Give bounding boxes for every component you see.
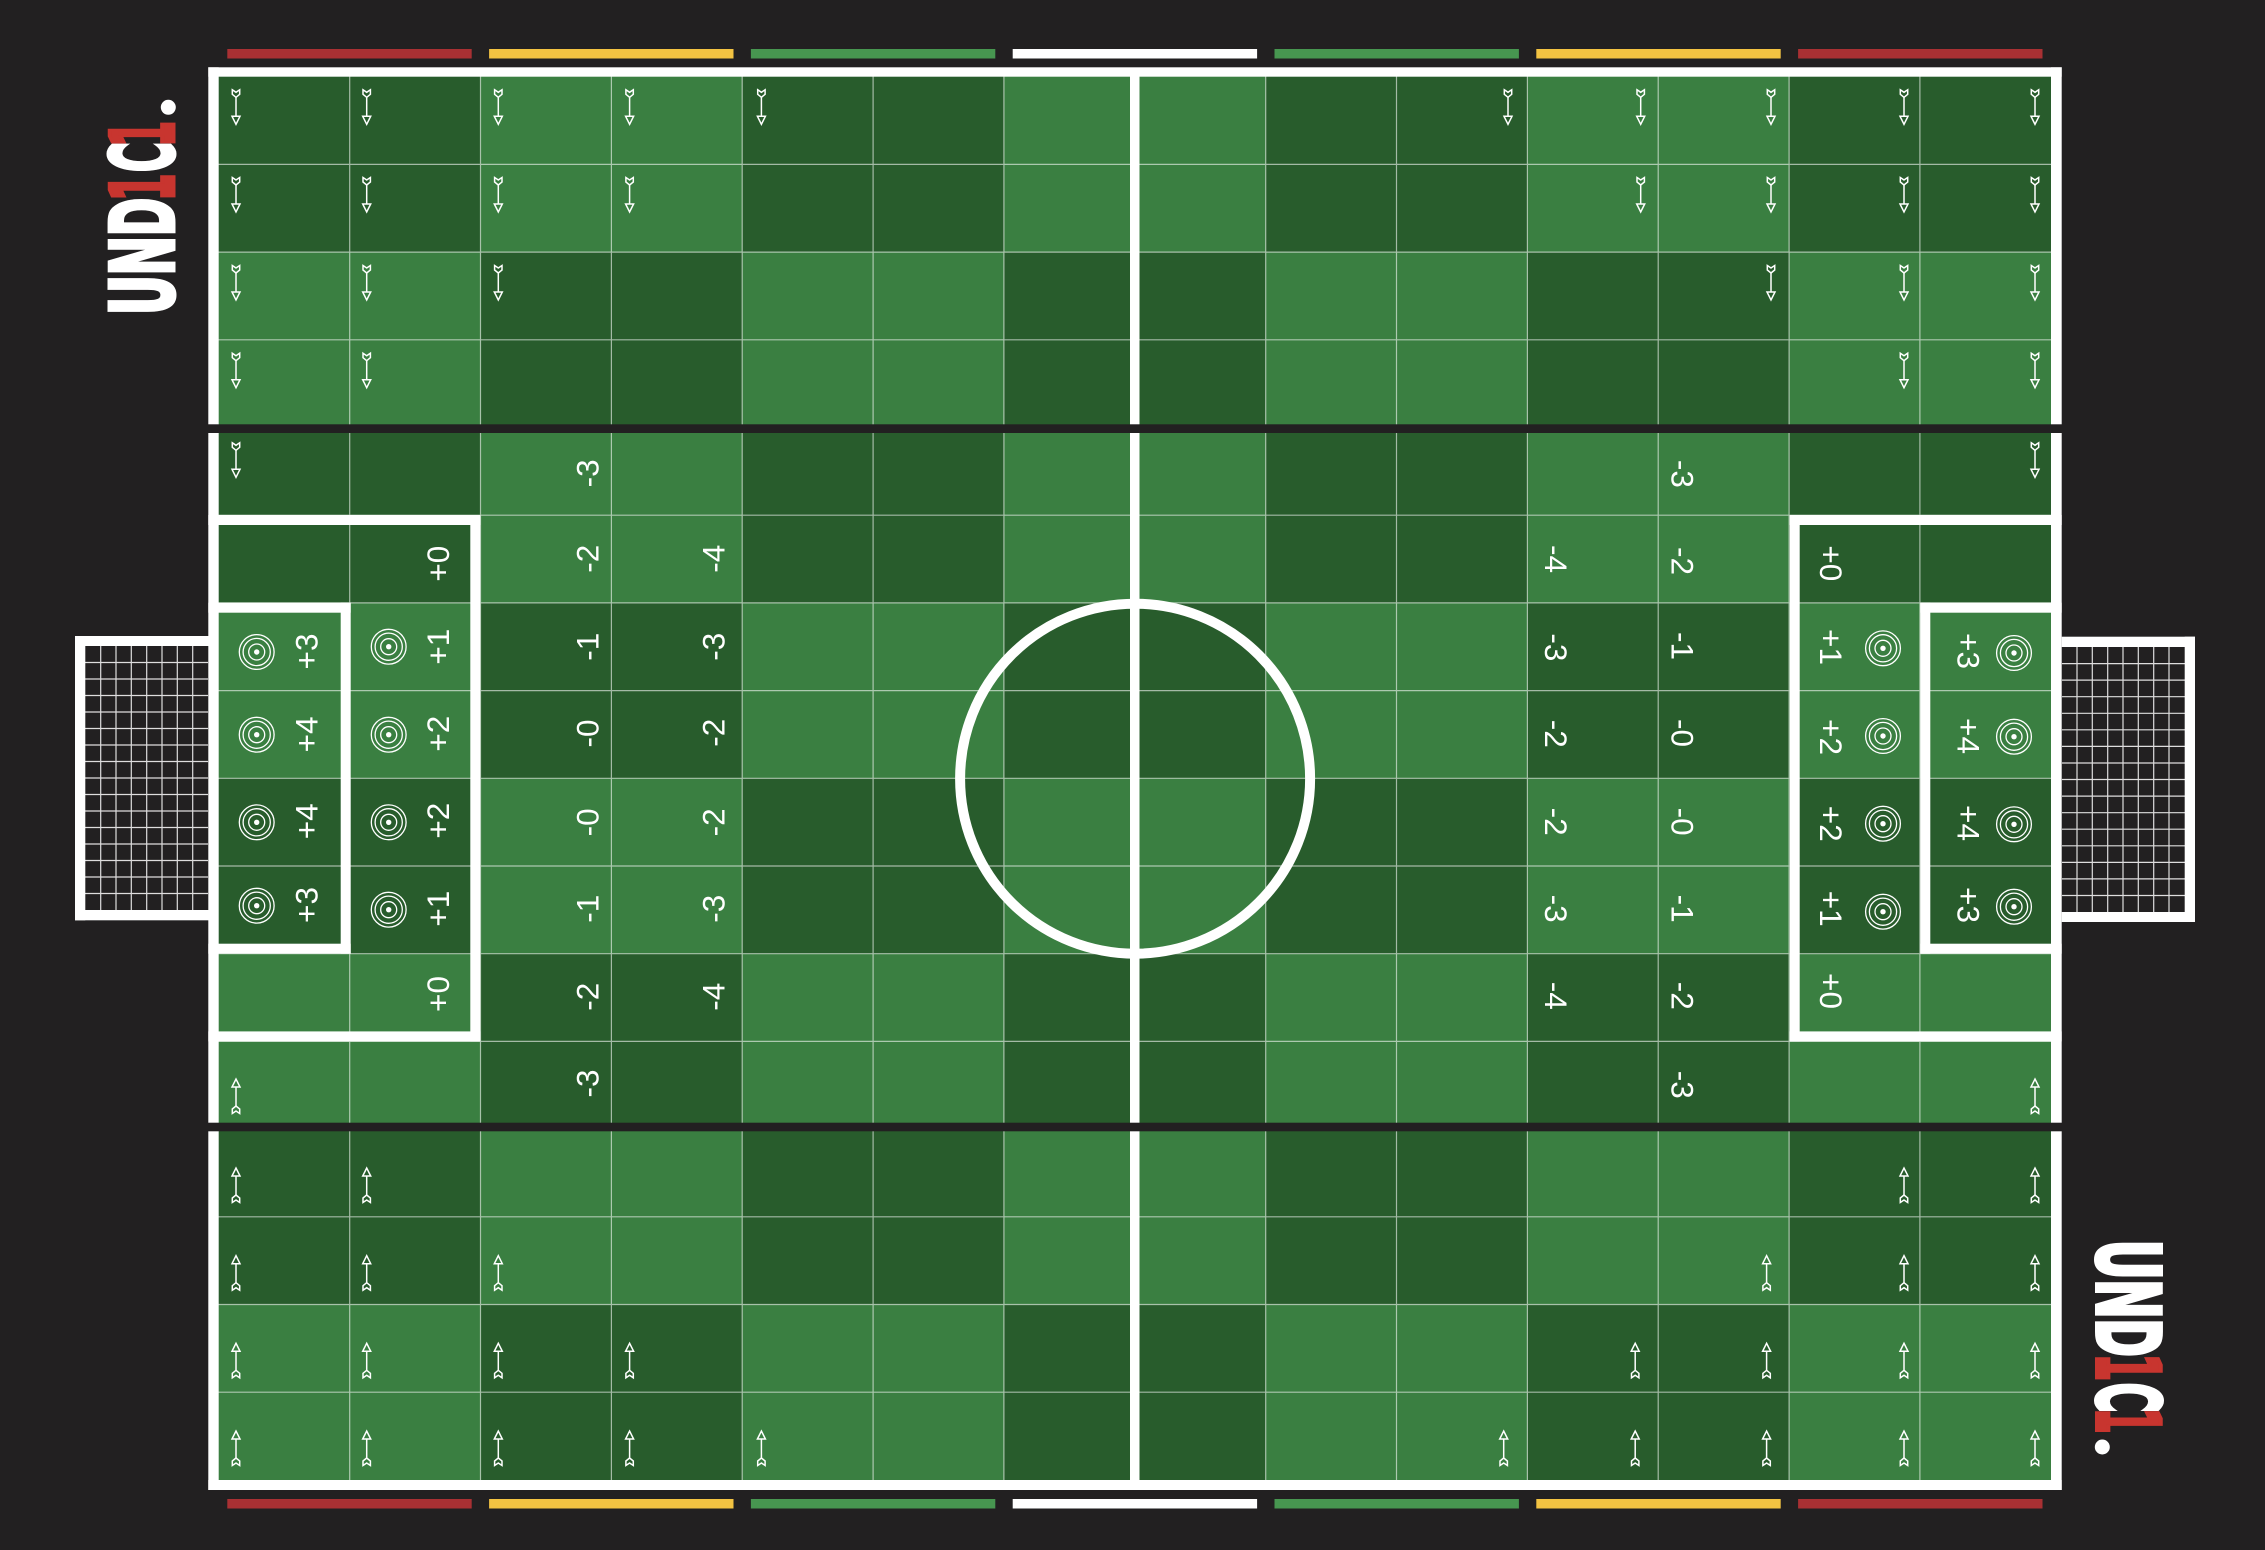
arrow [363, 1343, 371, 1378]
logo: top left: 1 [93, 173, 194, 201]
pitch outer boundary [208, 67, 2062, 1490]
left bonus labels [289, 546, 456, 1012]
logo: bottom right: C [2075, 1383, 2176, 1413]
arrow [1900, 178, 1908, 212]
left goal net [75, 636, 208, 920]
right penalty labels: -1 [1664, 632, 1700, 660]
arrow [1900, 266, 1908, 300]
right penalty labels: -2 [1664, 547, 1700, 575]
arrow [363, 1168, 371, 1202]
arrow [757, 1431, 765, 1466]
arrow [1900, 1431, 1908, 1466]
arrow [2031, 1256, 2039, 1290]
icon: target [371, 629, 406, 664]
right bonus labels: +4 [1950, 718, 1986, 754]
right penalty box [1790, 515, 2062, 1041]
left penalty labels: -3 [569, 459, 605, 487]
arrow [1900, 1343, 1908, 1378]
top colour stripes [227, 49, 2042, 58]
right shooting targets [1866, 631, 2031, 929]
arrow [1767, 178, 1775, 212]
arrow [232, 1431, 240, 1466]
right bonus labels: +1 [1813, 891, 1849, 927]
upper dark band [208, 424, 2062, 433]
right goal box [1920, 603, 2062, 954]
icon: target [1997, 719, 2031, 754]
logo: top left: D [94, 198, 195, 236]
arrow [494, 1256, 502, 1290]
arrow [494, 90, 502, 124]
bottom colour stripes [227, 1499, 2042, 1508]
arrow [1900, 1256, 1908, 1290]
arrow [232, 443, 240, 477]
centre circle [960, 604, 1310, 954]
halfway line [1130, 70, 1140, 1485]
left bonus labels: +2 [420, 716, 456, 752]
icon: target [1997, 889, 2031, 924]
logo: top left: N [93, 236, 195, 276]
left penalty labels: -3 [569, 1069, 605, 1098]
right penalty labels: -2 [1664, 982, 1700, 1010]
arrow [494, 266, 502, 300]
arrow [494, 1431, 502, 1466]
logo: top left [93, 100, 195, 315]
arrow [1763, 1256, 1771, 1290]
left bonus labels: +4 [289, 716, 325, 752]
left penalty labels [569, 459, 732, 1098]
icon: target [371, 892, 406, 927]
logo: top left: U [93, 275, 195, 315]
right penalty labels: -2 [1538, 808, 1574, 836]
right bonus labels: +0 [1813, 545, 1849, 581]
arrow [1767, 266, 1775, 300]
right penalty labels: -3 [1538, 895, 1574, 923]
arrow [2031, 443, 2039, 477]
arrow [626, 1431, 634, 1466]
right bonus labels: +3 [1950, 633, 1986, 669]
left penalty labels: -3 [696, 895, 732, 923]
left bonus labels: +4 [289, 803, 325, 839]
down arrows: top half [232, 90, 2039, 477]
logo: bottom right [2075, 1239, 2178, 1454]
left penalty labels: -2 [569, 545, 605, 573]
arrow [232, 1256, 240, 1290]
arrow [232, 1343, 240, 1378]
left penalty box [208, 515, 480, 1041]
arrow [232, 1079, 240, 1114]
arrow [494, 178, 502, 212]
icon: target [1866, 719, 1900, 753]
icon: target [1866, 631, 1900, 666]
arrow [494, 1343, 502, 1378]
left penalty labels: -2 [569, 983, 605, 1011]
arrow [626, 1343, 634, 1378]
left penalty labels: -0 [569, 719, 605, 748]
right penalty labels: -3 [1664, 1071, 1700, 1099]
icon: target [1997, 636, 2031, 670]
arrow [2031, 178, 2039, 212]
arrow [1763, 1343, 1771, 1378]
arrow [2031, 90, 2039, 124]
right bonus labels: +4 [1950, 805, 1986, 841]
pitch checker turf [218, 70, 2052, 1482]
arrow [1900, 353, 1908, 388]
arrow [363, 1431, 371, 1466]
arrow [232, 353, 240, 388]
arrow [626, 178, 634, 212]
arrow [2031, 353, 2039, 388]
arrow [363, 266, 371, 300]
arrow [2031, 1079, 2039, 1114]
logo: bottom right: U [2076, 1239, 2178, 1280]
logo: bottom right: D [2076, 1318, 2177, 1357]
right bonus labels: +2 [1813, 806, 1849, 842]
left penalty labels: -2 [696, 719, 732, 747]
right penalty labels: -0 [1664, 808, 1700, 836]
arrow [1900, 1168, 1908, 1202]
arrow [363, 353, 371, 388]
left penalty labels: -1 [569, 633, 605, 661]
logo: bottom right: 1 [2076, 1354, 2178, 1381]
arrow [1763, 1431, 1771, 1466]
arrow [363, 1256, 371, 1290]
arrow [1767, 90, 1775, 124]
right penalty labels: -4 [1538, 982, 1574, 1010]
left penalty labels: -4 [696, 545, 732, 573]
arrow [2031, 1431, 2039, 1466]
left penalty labels: -3 [696, 633, 732, 661]
icon: target [239, 635, 274, 669]
left goal box [208, 603, 351, 954]
left bonus labels: +1 [420, 629, 456, 665]
arrow [363, 90, 371, 124]
arrow [1631, 1343, 1639, 1378]
arrow [232, 178, 240, 212]
right penalty labels [1538, 460, 1700, 1099]
right penalty labels: -4 [1538, 545, 1574, 573]
arrow [1637, 90, 1645, 124]
logo: bottom right: N [2076, 1279, 2178, 1319]
right penalty labels: -2 [1538, 720, 1574, 748]
icon: target [1997, 807, 2031, 842]
arrow [757, 90, 765, 124]
arrow [2031, 1343, 2039, 1378]
arrow [363, 178, 371, 212]
arrow [1900, 90, 1908, 124]
icon: target [1866, 806, 1900, 841]
arrow [626, 90, 634, 124]
left penalty labels: -4 [696, 983, 732, 1011]
left penalty labels: -1 [569, 895, 605, 923]
logo: top left: C [94, 142, 195, 172]
left bonus labels: +0 [420, 976, 456, 1012]
left penalty labels: -0 [569, 808, 605, 836]
icon: target [239, 888, 274, 923]
arrow [1504, 90, 1512, 124]
arrow [232, 90, 240, 124]
right bonus labels: +1 [1813, 629, 1849, 665]
arrow [1637, 178, 1645, 212]
logo: bottom right: 1 [2076, 1408, 2178, 1434]
arrow [232, 266, 240, 300]
right bonus labels [1813, 545, 1986, 1009]
right goal net [2062, 637, 2195, 922]
right bonus labels: +0 [1813, 973, 1849, 1009]
left bonus labels: +0 [420, 546, 456, 582]
right bonus labels: +2 [1813, 719, 1849, 755]
right bonus labels: +3 [1950, 887, 1986, 923]
icon: target [239, 805, 274, 840]
icon: target [371, 717, 406, 752]
right penalty labels: -3 [1538, 633, 1574, 661]
right penalty labels: -1 [1664, 895, 1700, 923]
left bonus labels: +3 [289, 634, 325, 669]
logo: top left: 1 [93, 121, 194, 147]
left bonus labels: +3 [289, 887, 325, 923]
arrow [232, 1168, 240, 1202]
up arrows: bottom half [232, 1079, 2039, 1466]
lower dark band [208, 1123, 2062, 1131]
left shooting targets [239, 629, 406, 927]
right penalty labels: -0 [1664, 719, 1700, 747]
arrow [2031, 1168, 2039, 1202]
left bonus labels: +1 [420, 891, 456, 927]
left bonus labels: +2 [420, 803, 456, 839]
left penalty labels: -2 [696, 808, 732, 836]
icon: target [371, 805, 406, 840]
arrow [1500, 1431, 1508, 1466]
arrow [2031, 266, 2039, 300]
arrow [1631, 1431, 1639, 1466]
icon: target [1866, 894, 1900, 929]
right penalty labels: -3 [1664, 460, 1700, 488]
icon: target [239, 717, 274, 752]
